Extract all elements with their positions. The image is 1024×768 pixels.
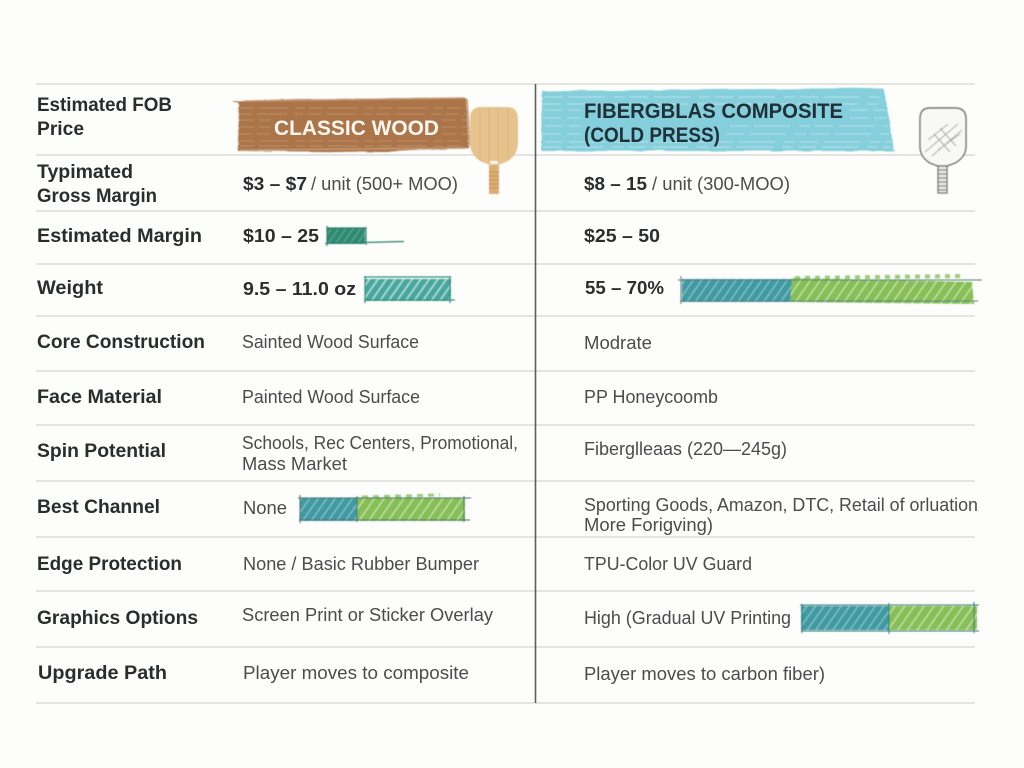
header: fiberglass swatch: FIBERGBLAS COMPOSITE xyxy=(584,100,843,123)
classic wood values: 9.5 – 11.0 oz xyxy=(243,278,356,299)
fiberglass composite values: Sporting Goods, Amazon, DTC, Retail of orluation xyxy=(584,495,978,515)
bar: weight wood xyxy=(364,276,455,303)
classic wood values: None / Basic Rubber Bumper xyxy=(243,554,479,574)
classic wood values: Sainted Wood Surface xyxy=(242,332,419,352)
classic wood values: / unit (500+ MOO) xyxy=(311,174,458,194)
fiberglass composite values: $25 – 50 xyxy=(584,225,660,246)
row labels: Edge Protection xyxy=(37,553,182,575)
fiberglass composite values: More Forigving) xyxy=(584,515,713,535)
classic wood values: Mass Market xyxy=(242,454,347,474)
bar: graphics options fiberglass xyxy=(800,602,979,634)
bar: weight fiberglass xyxy=(678,276,982,304)
fiberglass composite values: 55 – 70% xyxy=(585,277,664,298)
row labels xyxy=(37,94,205,684)
row labels: Graphics Options xyxy=(37,607,198,629)
row labels: Weight xyxy=(37,277,104,299)
row labels: Upgrade Path xyxy=(38,662,167,684)
header: classic wood swatch xyxy=(232,98,470,152)
row labels: Estimated FOB xyxy=(37,94,172,116)
fiberglass composite values xyxy=(584,173,978,684)
fiberglass composite values: PP Honeycoomb xyxy=(584,387,718,407)
bar: estimated margin wood xyxy=(325,226,404,246)
classic wood values: Painted Wood Surface xyxy=(242,387,420,407)
fiberglass composite values: Player moves to carbon fiber) xyxy=(584,664,825,684)
row labels: Typimated xyxy=(37,161,133,183)
classic wood values: Player moves to composite xyxy=(243,663,469,683)
header: classic wood swatch: CLASSIC WOOD xyxy=(274,117,439,140)
fiberglass composite values: High (Gradual UV Printing xyxy=(584,608,791,628)
fiberglass composite values: Fiberglleaas (220—245g) xyxy=(584,439,787,459)
classic wood values: $10 – 25 xyxy=(243,225,319,246)
bar: best channel wood xyxy=(298,495,471,523)
row labels: Gross Margin xyxy=(37,185,157,207)
fiberglass composite values: $8 – 15 xyxy=(584,173,647,194)
row labels: Core Construction xyxy=(37,331,205,353)
classic wood values xyxy=(242,173,518,683)
row labels: Face Material xyxy=(37,386,162,408)
fiberglass composite values: Modrate xyxy=(584,333,652,353)
fiberglass composite values: / unit (300-MOO) xyxy=(652,174,790,194)
classic wood values: None xyxy=(243,498,287,518)
classic wood values: $3 – $7 xyxy=(243,173,307,194)
icon: composite paddle xyxy=(920,108,966,193)
icon: wood paddle xyxy=(470,107,518,194)
row labels: Estimated Margin xyxy=(37,225,202,247)
header: fiberglass swatch: (COLD PRESS) xyxy=(584,124,720,147)
row labels: Best Channel xyxy=(37,496,160,518)
row labels: Price xyxy=(37,118,84,140)
classic wood values: Schools, Rec Centers, Promotional, xyxy=(242,433,518,453)
fiberglass composite values: TPU-Color UV Guard xyxy=(584,554,752,574)
header: fiberglass swatch xyxy=(541,88,894,151)
classic wood values: Screen Print or Sticker Overlay xyxy=(242,605,493,625)
row labels: Spin Potential xyxy=(37,440,166,462)
